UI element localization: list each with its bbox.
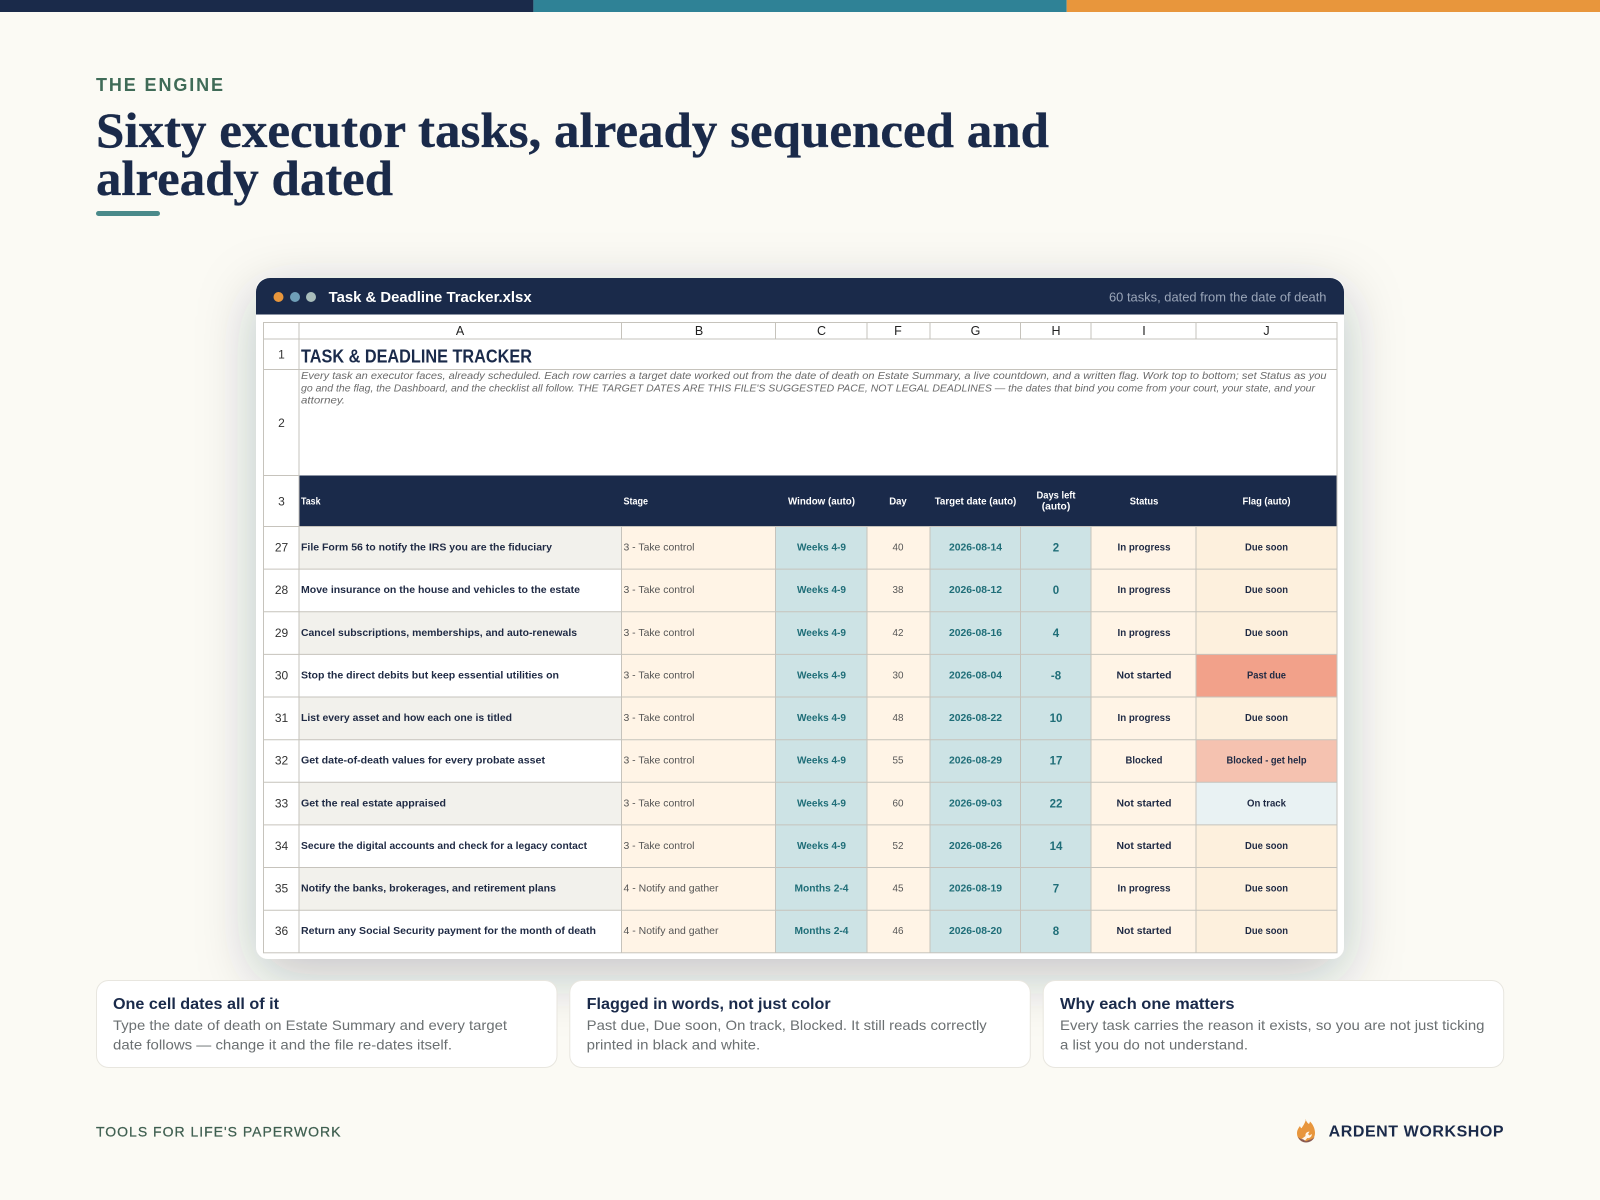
table header row: (auto) xyxy=(1042,502,1070,513)
row 30: Stop the direct debits but keep essential utilities on xyxy=(301,669,559,681)
row 30: -8 xyxy=(1051,670,1062,682)
row 29: 29 xyxy=(275,626,288,640)
row 27: In progress xyxy=(1118,541,1171,553)
row 27: Weeks 4-9 xyxy=(797,541,846,553)
row 27: 2 xyxy=(1053,542,1059,554)
row 31 xyxy=(275,697,1337,740)
footer tagline: TOOLS FOR LIFE'S PAPERWORK xyxy=(96,1124,341,1140)
row 34: 3 - Take control xyxy=(624,840,694,852)
row 31: Weeks 4-9 xyxy=(797,712,846,724)
spreadsheet column headers: B xyxy=(695,324,703,338)
row 28 xyxy=(275,569,1337,612)
title xyxy=(96,102,1049,206)
row 29: In progress xyxy=(1118,627,1171,639)
row 32 xyxy=(275,740,1337,782)
row 32: Get date-of-death values for every probate asset xyxy=(301,755,546,767)
panel: flagged in words: Flagged in words, not just color xyxy=(587,996,831,1013)
row 27: Due soon xyxy=(1245,541,1288,553)
panel: flagged in words: Past due, Due soon, On track, Blocked. It still reads correctly xyxy=(587,1017,987,1033)
table header row: Target date (auto) xyxy=(935,496,1016,508)
row 27: 2026-08-14 xyxy=(949,541,1002,553)
row 33: 33 xyxy=(275,796,288,810)
panel: why each one matters xyxy=(1043,980,1504,1068)
row 36: Return any Social Security payment for the month of death xyxy=(301,925,596,937)
table header row: Stage xyxy=(624,496,648,508)
spreadsheet column headers: J xyxy=(1263,324,1270,338)
table header row: 3 xyxy=(278,494,285,508)
table header row: Task xyxy=(301,496,321,508)
sheet description row: go and the flag, the Dashboard, and the checklist all follow. THE TARGET DATES ARE THIS FILE'S SUGGESTED PACE, NOT LEGAL DEADLINES — the dates that bind you come from your court, your state, and your xyxy=(301,382,1315,394)
row 33: 3 - Take control xyxy=(624,797,694,809)
window title bar: Task & Deadline Tracker.xlsx xyxy=(329,289,532,306)
panel: why each one matters: Why each one matters xyxy=(1060,996,1235,1013)
row 31: 2026-08-22 xyxy=(949,712,1002,724)
row 30: Past due xyxy=(1247,669,1286,681)
row 32: 55 xyxy=(892,755,904,767)
window card background xyxy=(256,278,1344,959)
top accent bar xyxy=(0,0,1600,12)
window title bar xyxy=(256,278,1344,314)
row 28: 2026-08-12 xyxy=(949,584,1002,596)
row 27: 3 - Take control xyxy=(624,541,694,553)
sheet title row: 1 xyxy=(278,348,285,362)
row 35: In progress xyxy=(1118,882,1171,894)
spreadsheet column headers: A xyxy=(456,324,465,338)
row 29: 42 xyxy=(892,627,904,639)
row 33: Get the real estate appraised xyxy=(301,797,446,809)
eyebrow: THE ENGINE xyxy=(96,75,223,95)
row 36: 2026-08-20 xyxy=(949,925,1002,937)
row 31: 10 xyxy=(1050,713,1062,725)
row 29: Weeks 4-9 xyxy=(797,627,846,639)
row 34: 14 xyxy=(1050,841,1063,853)
row 28: Due soon xyxy=(1245,584,1288,596)
row 34: Secure the digital accounts and check for a legacy contact xyxy=(301,840,587,852)
table header row: Window (auto) xyxy=(788,496,855,508)
row 36: Months 2-4 xyxy=(794,925,849,937)
row 31: 31 xyxy=(275,711,288,725)
panel: one cell dates all of it: date follows — change it and the file re-dates itself. xyxy=(113,1036,452,1052)
row 35: 7 xyxy=(1053,884,1059,896)
row 33: On track xyxy=(1247,797,1286,809)
row 33: 2026-09-03 xyxy=(949,797,1002,809)
panel: why each one matters: Every task carries the reason it exists, so you are not just ticking xyxy=(1060,1017,1484,1033)
window title bar: 60 tasks, dated from the date of death xyxy=(1109,290,1326,304)
panel: one cell dates all of it: Type the date of death on Estate Summary and every target xyxy=(113,1017,507,1033)
row 34: 2026-08-26 xyxy=(949,840,1002,852)
table header row xyxy=(278,476,1337,526)
row 36 xyxy=(275,910,1337,953)
row 32: 17 xyxy=(1050,756,1062,768)
row 34: Not started xyxy=(1116,840,1172,852)
panel: spreadsheet window xyxy=(256,278,1344,959)
row 35: Due soon xyxy=(1245,882,1288,894)
row 27: 27 xyxy=(275,540,288,554)
row 35: 45 xyxy=(892,882,904,894)
row 34: 34 xyxy=(275,839,288,853)
row 34: 52 xyxy=(892,840,904,852)
row 33: Weeks 4-9 xyxy=(797,797,846,809)
spreadsheet column headers: G xyxy=(971,324,980,338)
row 29 xyxy=(275,612,1337,654)
row 28: 0 xyxy=(1053,585,1059,597)
row 28: Weeks 4-9 xyxy=(797,584,846,596)
row 36: Due soon xyxy=(1245,925,1288,937)
table header row: Status xyxy=(1130,496,1159,508)
row 34: Due soon xyxy=(1245,840,1288,852)
row 32: Blocked xyxy=(1126,755,1162,767)
row 30: 3 - Take control xyxy=(624,669,694,681)
row 33: 60 xyxy=(892,797,904,809)
row 34 xyxy=(275,825,1337,868)
row 27 xyxy=(275,526,1337,569)
title: already dated xyxy=(96,150,393,206)
row 35: 35 xyxy=(275,882,288,896)
row 29: 2026-08-16 xyxy=(949,627,1002,639)
title: Sixty executor tasks, already sequenced and xyxy=(96,102,1049,158)
row 29: 3 - Take control xyxy=(624,627,694,639)
row 29: 4 xyxy=(1053,628,1060,640)
row 33 xyxy=(275,782,1337,825)
panel: one cell dates all of it xyxy=(96,980,557,1068)
row 32: 2026-08-29 xyxy=(949,755,1002,767)
row 36: 46 xyxy=(892,925,904,937)
brand name: ARDENT WORKSHOP xyxy=(1329,1124,1504,1140)
sheet description row: 2 xyxy=(278,416,285,430)
spreadsheet column headers: C xyxy=(817,324,826,338)
row 35 xyxy=(275,868,1337,910)
row 32: 3 - Take control xyxy=(624,755,694,767)
row 27: 40 xyxy=(892,541,904,553)
row 32: Blocked - get help xyxy=(1226,755,1306,767)
panel: flagged in words: printed in black and white. xyxy=(587,1036,760,1052)
table header row: Flag (auto) xyxy=(1242,496,1290,508)
row 36: Not started xyxy=(1116,925,1172,937)
row 31: List every asset and how each one is titled xyxy=(301,712,512,724)
row 33: Not started xyxy=(1116,797,1172,809)
row 28: Move insurance on the house and vehicles to the estate xyxy=(301,584,580,596)
row 28: In progress xyxy=(1118,584,1171,596)
row 29: Cancel subscriptions, memberships, and auto-renewals xyxy=(301,627,577,639)
icon: flame and wrench logo xyxy=(1297,1119,1315,1142)
row 30: 30 xyxy=(892,669,904,681)
row 30: Not started xyxy=(1116,669,1172,681)
sheet title row: TASK & DEADLINE TRACKER xyxy=(301,346,532,366)
row 34: Weeks 4-9 xyxy=(797,840,846,852)
row 29: Due soon xyxy=(1245,627,1288,639)
spreadsheet column headers: I xyxy=(1142,324,1146,338)
table header row: Days left xyxy=(1036,490,1076,502)
panel: one cell dates all of it: One cell dates all of it xyxy=(113,996,280,1013)
row 28: 3 - Take control xyxy=(624,584,694,596)
row 36: 8 xyxy=(1053,926,1060,938)
spreadsheet column headers xyxy=(456,324,1270,338)
row 31: In progress xyxy=(1118,712,1171,724)
sheet description row: Every task an executor faces, already scheduled. Each row carries a target date worked out from the date of death on Estate Summary, a live countdown, and a written flag. Work top to bottom; set Status as you xyxy=(301,370,1327,382)
row 36: 4 - Notify and gather xyxy=(624,925,719,937)
row 31: 48 xyxy=(892,712,904,724)
table header row: Day xyxy=(889,496,907,508)
row 30: 2026-08-04 xyxy=(949,669,1002,681)
row 36: 36 xyxy=(275,924,288,938)
row 35: Months 2-4 xyxy=(794,882,849,894)
sheet description row xyxy=(278,370,1327,430)
panel: flagged in words xyxy=(570,980,1030,1068)
row 35: 4 - Notify and gather xyxy=(624,882,719,894)
spreadsheet column headers: H xyxy=(1051,324,1061,338)
row 30: Weeks 4-9 xyxy=(797,669,846,681)
row 28: 28 xyxy=(275,583,288,597)
row 33: 22 xyxy=(1050,798,1062,810)
row 27: File Form 56 to notify the IRS you are the fiduciary xyxy=(301,541,552,553)
spreadsheet column headers: F xyxy=(894,324,902,338)
row 30: 30 xyxy=(275,668,288,682)
row 31: 3 - Take control xyxy=(624,712,694,724)
row 28: 38 xyxy=(892,584,904,596)
panel: why each one matters: a list you do not understand. xyxy=(1060,1036,1248,1052)
row 31: Due soon xyxy=(1245,712,1288,724)
row 30 xyxy=(275,654,1337,697)
row 35: 2026-08-19 xyxy=(949,882,1002,894)
row 35: Notify the banks, brokerages, and retirement plans xyxy=(301,882,556,894)
row 32: 32 xyxy=(275,754,288,768)
row 32: Weeks 4-9 xyxy=(797,755,846,767)
title underline xyxy=(96,211,160,216)
sheet description row: attorney. xyxy=(301,394,345,406)
